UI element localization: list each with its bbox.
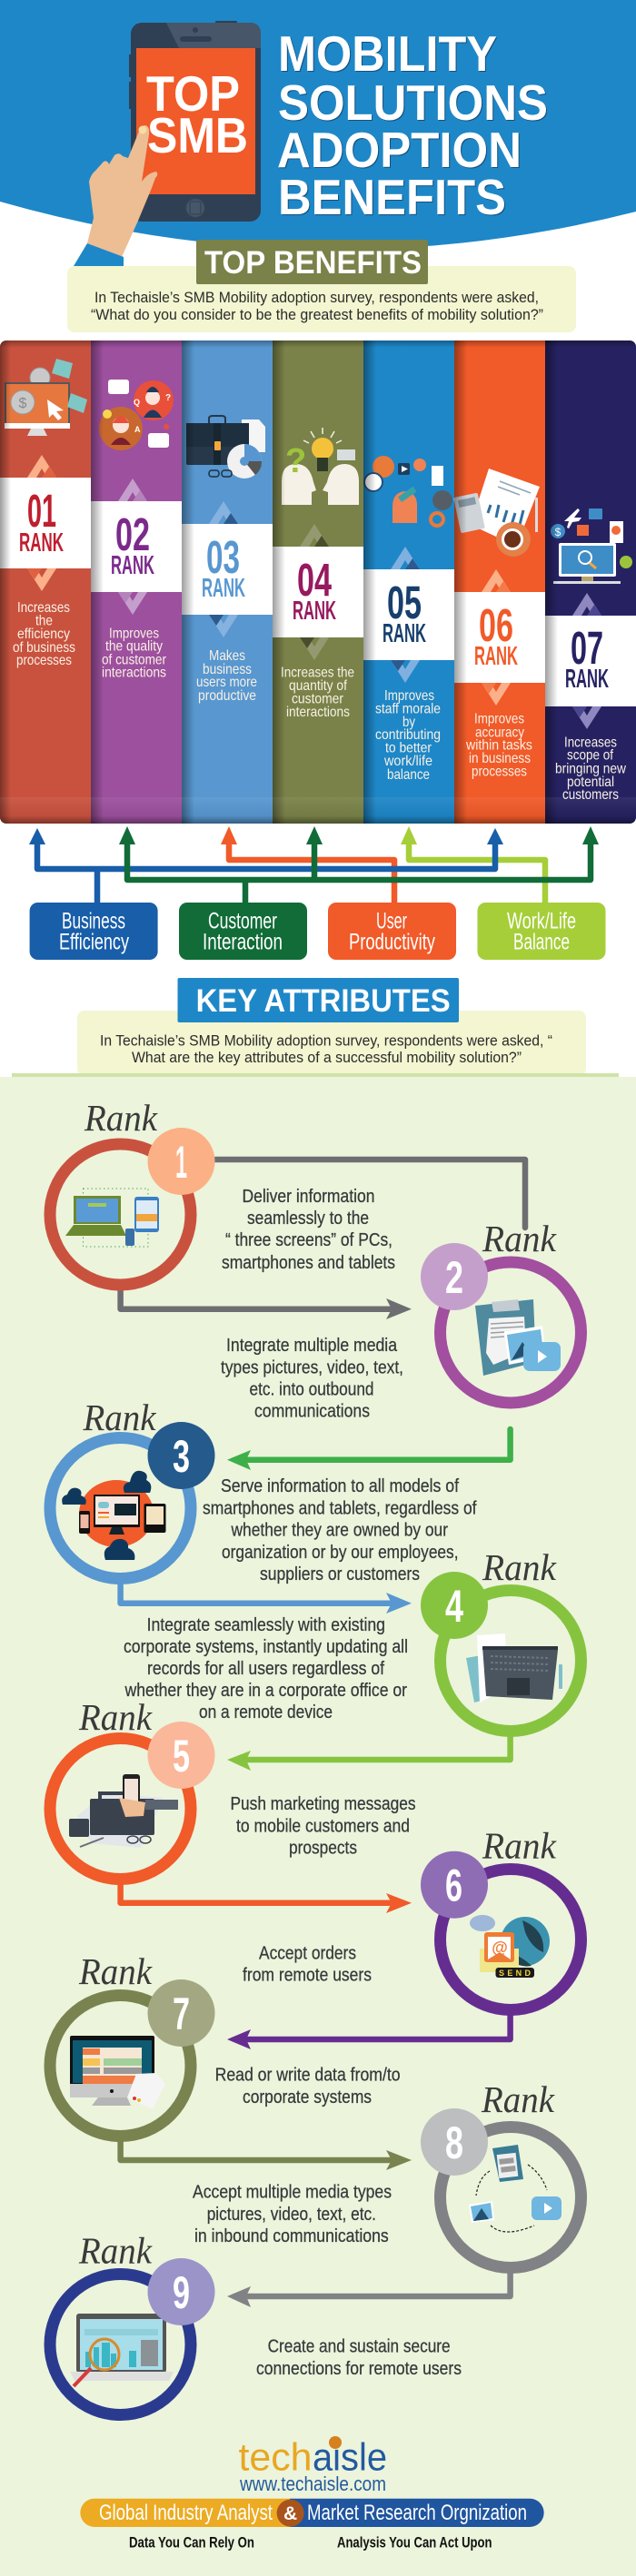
phone label: TOP [146, 65, 240, 122]
rank 7: read or write data: Rank [78, 1950, 153, 1992]
column 6: rank 06: Improves [474, 712, 524, 727]
column 6: rank 06: accuracy [475, 725, 524, 740]
column 4: rank 04 [281, 554, 354, 720]
text: rank 3 attribute: suppliers or customers [260, 1564, 420, 1584]
key attributes background [12, 1073, 619, 1077]
text: rank 5 attribute: Push marketing messages [231, 1794, 416, 1814]
rank 7: read or write data [50, 1950, 214, 2136]
rank 1: three screens [50, 1097, 214, 1285]
icon: questions and answers: Q [134, 398, 140, 407]
icon: clipboard and media cycle [469, 2145, 561, 2232]
column 2: rank 02 [102, 508, 167, 680]
logo: techaisle: www.techaisle.com [239, 2472, 386, 2495]
text: rank 7 attribute: Read or write data from/to [215, 2066, 401, 2086]
connector: rank 3 to rank 4 [121, 1580, 412, 1614]
column 1: rank 01: processes [16, 653, 72, 668]
rank 6: accept orders [421, 1825, 581, 2010]
column 4: rank 04: Increases the [281, 665, 354, 680]
text: rank 4 attribute: whether they are in a corporate office or [124, 1681, 407, 1701]
text: rank 8 attribute [193, 2183, 392, 2246]
text: rank 3 attribute: smartphones and tablets, regardless of [203, 1499, 477, 1519]
text: rank 2 attribute: types pictures, video, text, [221, 1358, 403, 1378]
rank 1: three screens: Rank [84, 1097, 158, 1139]
connector: rank 5 to rank 6 [121, 1880, 412, 1913]
text: rank 5 attribute [231, 1794, 416, 1859]
box: business efficiency [30, 903, 158, 960]
text: rank 3 attribute [203, 1476, 477, 1584]
box: work/life balance [478, 903, 605, 960]
box: work/life balance: Work/Life [507, 909, 576, 934]
text: rank 5 attribute: to mobile customers and [236, 1817, 410, 1837]
box: customer interaction [179, 903, 307, 960]
icon: email and globe [470, 1915, 550, 1978]
tagline: data: Data You Can Rely On [129, 2534, 254, 2551]
text: rank 2 attribute: Integrate multiple media [226, 1336, 398, 1356]
column 2: rank 02: of customer [102, 652, 167, 667]
column 5: rank 05: by [402, 715, 415, 730]
box: user productivity [328, 903, 456, 960]
text: rank 7 attribute: corporate systems [243, 2087, 372, 2107]
icon: email and globe: @ [492, 1939, 508, 1957]
column 1: rank 01: RANK [19, 528, 64, 558]
column 5: rank 05: to better [385, 741, 432, 756]
box: business efficiency: Efficiency [59, 930, 129, 955]
panel: top benefits intro: “What do you consider to be the greatest benefits of mobility solution?” [91, 306, 543, 323]
text: rank 6 attribute [243, 1944, 372, 1986]
column 6: rank 06 [465, 599, 532, 780]
column 4: rank 04: customer [292, 692, 344, 707]
main title: SOLUTIONS [278, 74, 548, 131]
column 3: rank 03: users more [196, 675, 257, 690]
box: user productivity: Productivity [349, 930, 435, 955]
rank 5: marketing messages: Rank [78, 1696, 153, 1738]
text: rank 1 attribute: “ three screens” of PCs, [225, 1230, 393, 1250]
icon: laptop and papers [466, 1633, 562, 1703]
panel: key attributes intro [77, 1011, 586, 1076]
column 3: rank 03: business [203, 662, 252, 677]
column 6: rank 06: processes [472, 765, 527, 780]
arrow: work/life balance [401, 826, 545, 903]
text: rank 4 attribute [124, 1615, 408, 1722]
rank 5: marketing messages: 5 [173, 1731, 190, 1781]
icon: laptop with magnifier [70, 2314, 174, 2386]
rank 2: multiple media [421, 1218, 581, 1403]
text: rank 4 attribute: records for all users regardless of [147, 1659, 384, 1679]
chevrons above and below rank bands [27, 455, 601, 729]
column 2: rank 02: the quality [105, 639, 163, 655]
banner: global industry analyst and market research [80, 2499, 544, 2527]
icon: laptop and phones [65, 1189, 159, 1247]
box: work/life balance: Balance [513, 930, 570, 955]
column 6: rank 06: RANK [474, 642, 518, 671]
column 2: rank 02: RANK [111, 551, 154, 580]
rank 5: marketing messages [50, 1696, 214, 1880]
icon: monitor with coins [5, 359, 87, 436]
column 7: rank 07: potential [567, 775, 614, 790]
column 1: rank 01: efficiency [17, 627, 70, 642]
main title: ADOPTION [277, 122, 522, 178]
rank 8: inbound media [421, 2078, 581, 2268]
column 7: rank 07: customers [562, 787, 619, 803]
column 7: rank 07: bringing new [555, 761, 626, 776]
arrows: business efficiency [29, 828, 503, 903]
column 7: rank 07: Increases [564, 735, 617, 751]
icon: smartphone [129, 21, 261, 222]
box: user productivity: User [376, 909, 407, 934]
text: rank 4 attribute: Integrate seamlessly with existing [147, 1615, 385, 1635]
column 1: rank 01: of business [13, 640, 75, 656]
text: rank 6 attribute: Accept orders [259, 1944, 356, 1964]
banner: global industry analyst and market research: Global Industry Analyst [99, 2501, 273, 2525]
text: rank 5 attribute: prospects [289, 1839, 357, 1859]
panel: top benefits intro [67, 266, 576, 332]
panel: key attributes intro: What are the key attributes of a successful mobility solution?” [132, 1049, 522, 1066]
rank 2: multiple media: Rank [482, 1218, 557, 1259]
column 5: rank 05: RANK [383, 619, 426, 648]
column 2: rank 02: 02 [115, 508, 150, 560]
text: rank 1 attribute [222, 1187, 395, 1273]
rank 3: all devices: Rank [83, 1397, 156, 1438]
text: rank 7 attribute [215, 2066, 401, 2107]
column 6: rank 06: within tasks [465, 737, 532, 754]
column 7: rank 07 [555, 622, 626, 803]
text: rank 2 attribute: communications [254, 1402, 370, 1422]
text: rank 4 attribute: on a remote device [199, 1703, 333, 1722]
column 5: rank 05 [375, 577, 441, 783]
icon: questions and answers: ? [165, 393, 171, 403]
white rank bands [0, 478, 636, 706]
rank 4: corporate systems: Rank [482, 1546, 557, 1588]
connector: rank 8 to rank 9 [227, 2268, 511, 2307]
column 5: rank 05: work/life [383, 754, 432, 769]
text: rank 3 attribute: Serve information to all models of [221, 1476, 459, 1496]
main title: MOBILITY [278, 25, 497, 82]
icon: desktop computer [70, 2036, 165, 2109]
column 7: rank 07: scope of [567, 748, 613, 764]
text: rank 9 attribute [256, 2337, 462, 2379]
rank 8: inbound media: 8 [445, 2117, 463, 2168]
banner: global industry analyst and market research: & [283, 2503, 297, 2524]
rank 9: secure connections: 9 [173, 2267, 190, 2318]
connector: rank 7 to rank 8 [121, 2138, 412, 2170]
text: rank 6 attribute: from remote users [243, 1966, 372, 1986]
text: rank 9 attribute: connections for remote users [256, 2359, 462, 2379]
phone label: SMB [147, 107, 248, 163]
text: rank 2 attribute: etc. into outbound [249, 1380, 374, 1400]
connector: rank 6 to rank 7 [227, 2011, 511, 2049]
icon: laptop with travel symbols [551, 508, 632, 584]
column 3: rank 03: RANK [202, 574, 245, 603]
text: rank 3 attribute: whether they are owned by our [231, 1521, 448, 1541]
icon: email and globe: SEND [499, 1969, 531, 1978]
text: rank 1 attribute: smartphones and tablets [222, 1253, 395, 1273]
column 5: rank 05: staff morale [375, 701, 441, 716]
icon: questions and answers: A [134, 425, 141, 434]
icon: report with calculator and coffee [453, 469, 540, 557]
rank 8: inbound media: Rank [481, 2078, 555, 2120]
icon: laptop with travel symbols: $ [555, 526, 561, 538]
text: rank 2 attribute [221, 1336, 403, 1422]
header background [0, 0, 636, 250]
icon: pointing hand [74, 125, 157, 266]
icon: questions and answers [99, 380, 174, 450]
heading: key attributes: KEY ATTRIBUTES [196, 983, 451, 1019]
column 2: rank 02: Improves [109, 627, 159, 642]
logo: techaisle [238, 2436, 387, 2495]
rank 4: corporate systems [421, 1546, 581, 1731]
column 4: rank 04: quantity of [289, 678, 347, 694]
icon: heads and idea bulb: ? [285, 442, 306, 480]
rank 9: secure connections: Rank [78, 2230, 153, 2272]
column 5: rank 05: contributing [375, 727, 441, 743]
icon: briefcase [186, 416, 265, 479]
rank 3: all devices: 3 [173, 1431, 190, 1482]
panel: top benefits intro: In Techaisle’s SMB Mobility adoption survey, respondents were asked, [94, 289, 539, 306]
box: business efficiency: Business [62, 909, 125, 934]
text: rank 3 attribute: organization or by our employees, [222, 1543, 458, 1563]
rank 7: read or write data: 7 [173, 1989, 190, 2039]
rank 4: corporate systems: 4 [445, 1581, 463, 1632]
column 4: rank 04: 04 [297, 554, 332, 606]
icon: monitor with coins: $ [19, 396, 27, 411]
text: rank 8 attribute: Accept multiple media types [193, 2183, 392, 2203]
column 3: rank 03: productive [198, 688, 256, 704]
rank 3: all devices [50, 1397, 214, 1578]
icon: devices and clouds [62, 1471, 165, 1560]
icon: head with science symbols [364, 456, 452, 526]
rank 6: accept orders: Rank [482, 1825, 557, 1867]
icon: heads and idea bulb [282, 428, 359, 505]
main title [277, 25, 548, 225]
column 1: rank 01 [13, 485, 75, 668]
column 3: rank 03: Makes [209, 648, 245, 664]
rank 1: three screens: 1 [175, 1137, 187, 1188]
column 6: rank 06: in business [469, 751, 531, 766]
column 5: rank 05: balance [387, 767, 430, 783]
column edge shadows [0, 341, 636, 824]
column 2: rank 02: interactions [102, 665, 166, 680]
panel: seven ranked benefit columns [0, 341, 636, 824]
text: rank 1 attribute: Deliver information [242, 1187, 374, 1207]
connector: rank 4 to rank 5 [227, 1732, 511, 1771]
rank 2: multiple media: 2 [445, 1252, 463, 1303]
phone label [146, 65, 248, 163]
text: rank 8 attribute: in inbound communications [194, 2226, 389, 2246]
heading: top benefits: TOP BENEFITS [204, 245, 422, 281]
text: rank 8 attribute: pictures, video, text, etc. [207, 2205, 376, 2225]
column 3: rank 03: 03 [206, 531, 240, 583]
column 3: rank 03 [196, 531, 257, 704]
text: rank 4 attribute: corporate systems, instantly updating all [124, 1637, 408, 1657]
arrows linking categories to benefit columns [29, 826, 599, 903]
box: customer interaction: Customer [208, 909, 277, 934]
column 5: rank 05: 05 [387, 577, 422, 628]
arrow: user productivity [221, 826, 394, 903]
box: customer interaction: Interaction [203, 930, 283, 955]
column 4: rank 04: interactions [286, 705, 350, 720]
column 1: rank 01: 01 [27, 485, 56, 537]
logo: techaisle: aisle [313, 2436, 387, 2480]
connector: rank 1 to rank 2 [121, 1160, 525, 1319]
column 6: rank 06: 06 [479, 599, 513, 651]
logo: techaisle: tech [238, 2436, 313, 2480]
column 5: rank 05: Improves [384, 688, 434, 704]
banner: global industry analyst and market research: Market Research Orgnization [307, 2501, 527, 2525]
icon: clipboard with media [475, 1299, 561, 1376]
column 1: rank 01: Increases [17, 600, 70, 616]
rank 9: secure connections [50, 2230, 214, 2415]
column 1: rank 01: the [35, 614, 53, 628]
column 7: rank 07: 07 [571, 622, 603, 674]
text: rank 9 attribute: Create and sustain secure [268, 2337, 451, 2357]
main title: BENEFITS [278, 169, 506, 225]
icon: briefcase and phone in hand [69, 1774, 178, 1848]
panel: key attributes intro: In Techaisle’s SMB Mobility adoption survey, respondents were asked, “ [100, 1032, 552, 1050]
tagline: analysis: Analysis You Can Act Upon [337, 2534, 492, 2551]
rank 6: accept orders: 6 [445, 1860, 462, 1911]
text: rank 1 attribute: seamlessly to the [247, 1209, 369, 1229]
column 4: rank 04: RANK [293, 597, 336, 626]
arrows: customer interaction [119, 826, 599, 903]
connector: rank 2 to rank 3 [227, 1429, 511, 1470]
